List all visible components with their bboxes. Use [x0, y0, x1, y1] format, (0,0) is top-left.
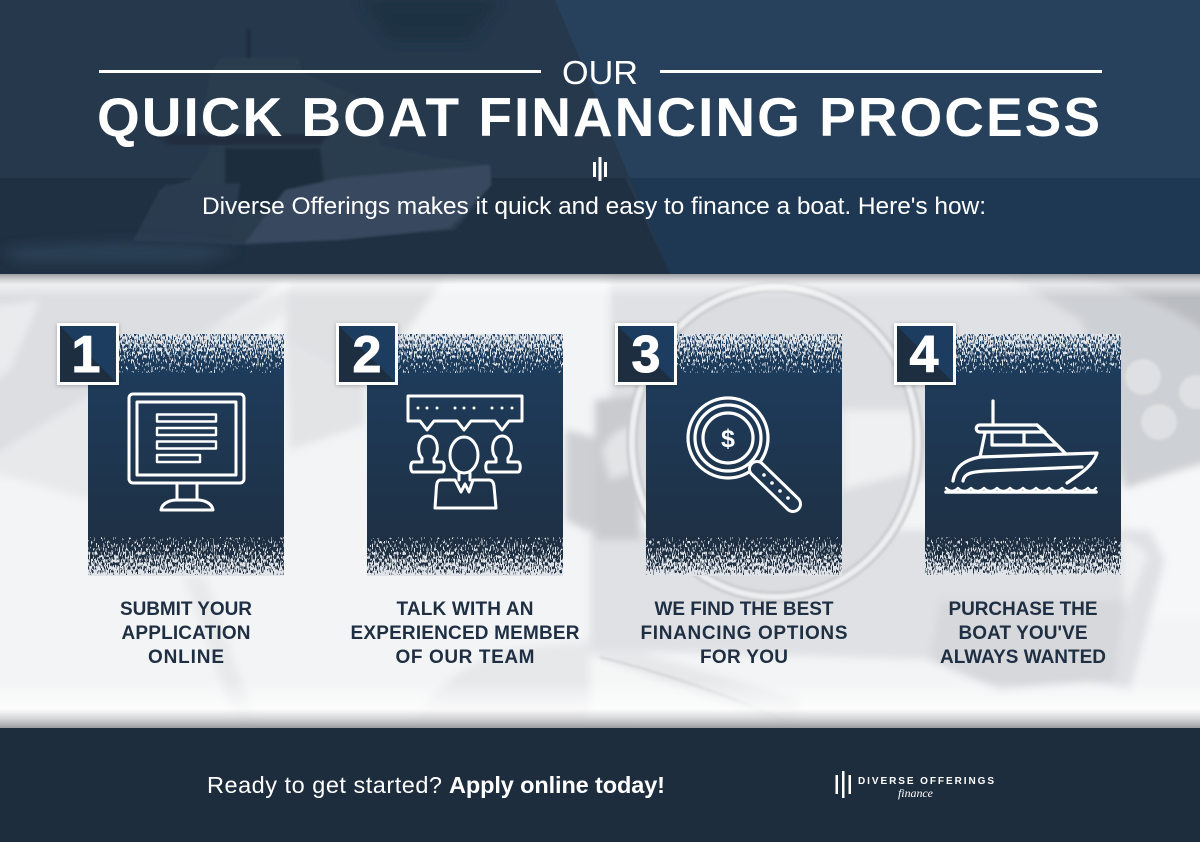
number badge 2: 2: [353, 326, 381, 384]
panel: step 1: [58, 324, 284, 668]
panel: step 3: [616, 324, 848, 668]
icon: motor yacht on waves: [946, 401, 1097, 492]
caption step 2: [350, 599, 580, 668]
logo: diverse offerings finance: DIVERSE OFFERINGS: [858, 776, 994, 787]
call to action: Apply online today!: [449, 772, 665, 798]
caption step 4: ALWAYS WANTED: [940, 647, 1106, 668]
title: QUICK BOAT FINANCING PROCESS: [97, 86, 1100, 148]
icon: computer application form: [129, 394, 244, 510]
number badge 4: 4: [910, 326, 939, 384]
heading: our: OUR: [562, 54, 638, 91]
caption step 3: FINANCING OPTIONS: [640, 623, 848, 644]
panel: header photo banner: [0, 0, 1200, 274]
caption step 3: FOR YOU: [700, 647, 788, 668]
caption step 1: SUBMIT YOUR: [120, 599, 252, 620]
icon: magnifying glass with dollar: $: [721, 425, 735, 453]
speech dots: [416, 406, 514, 410]
caption step 4: PURCHASE THE: [948, 599, 1098, 620]
icon: faint yacht in photo: [0, 30, 491, 262]
number badge 4: [896, 324, 954, 384]
caption step 1: APPLICATION: [122, 623, 250, 644]
icon: header logo bars: [593, 157, 607, 181]
panel: step 4: [896, 324, 1121, 668]
number badge 3: [616, 324, 676, 384]
caption step 1: ONLINE: [148, 647, 224, 668]
subtitle: Diverse Offerings makes it quick and easy to finance a boat. Here's how:: [202, 193, 986, 220]
panel: dashboard photo background: [0, 270, 1200, 740]
caption step 2: EXPERIENCED MEMBER: [350, 623, 580, 644]
caption step 3: [640, 599, 848, 668]
number badge 2: [338, 324, 396, 384]
number badge 3: 3: [632, 326, 660, 384]
caption step 3: WE FIND THE BEST: [654, 599, 834, 620]
caption step 1: [120, 599, 252, 668]
caption step 4: [940, 599, 1106, 668]
icon: magnifying glass with dollar: [688, 398, 793, 504]
number badge 1: 1: [72, 326, 100, 384]
number badge 1: [58, 324, 118, 384]
panel: step 2: [338, 324, 580, 668]
logo: diverse offerings finance: [836, 771, 994, 800]
caption step 2: OF OUR TEAM: [396, 647, 534, 668]
heading: our: [99, 54, 1102, 91]
logo: diverse offerings finance: finance: [898, 786, 934, 800]
caption step 4: BOAT YOU'VE: [958, 623, 1088, 644]
call to action: Ready to get started?: [207, 772, 442, 798]
icon: team talking: [408, 396, 522, 508]
panel: footer: [0, 728, 1200, 842]
caption step 2: TALK WITH AN: [396, 599, 534, 620]
